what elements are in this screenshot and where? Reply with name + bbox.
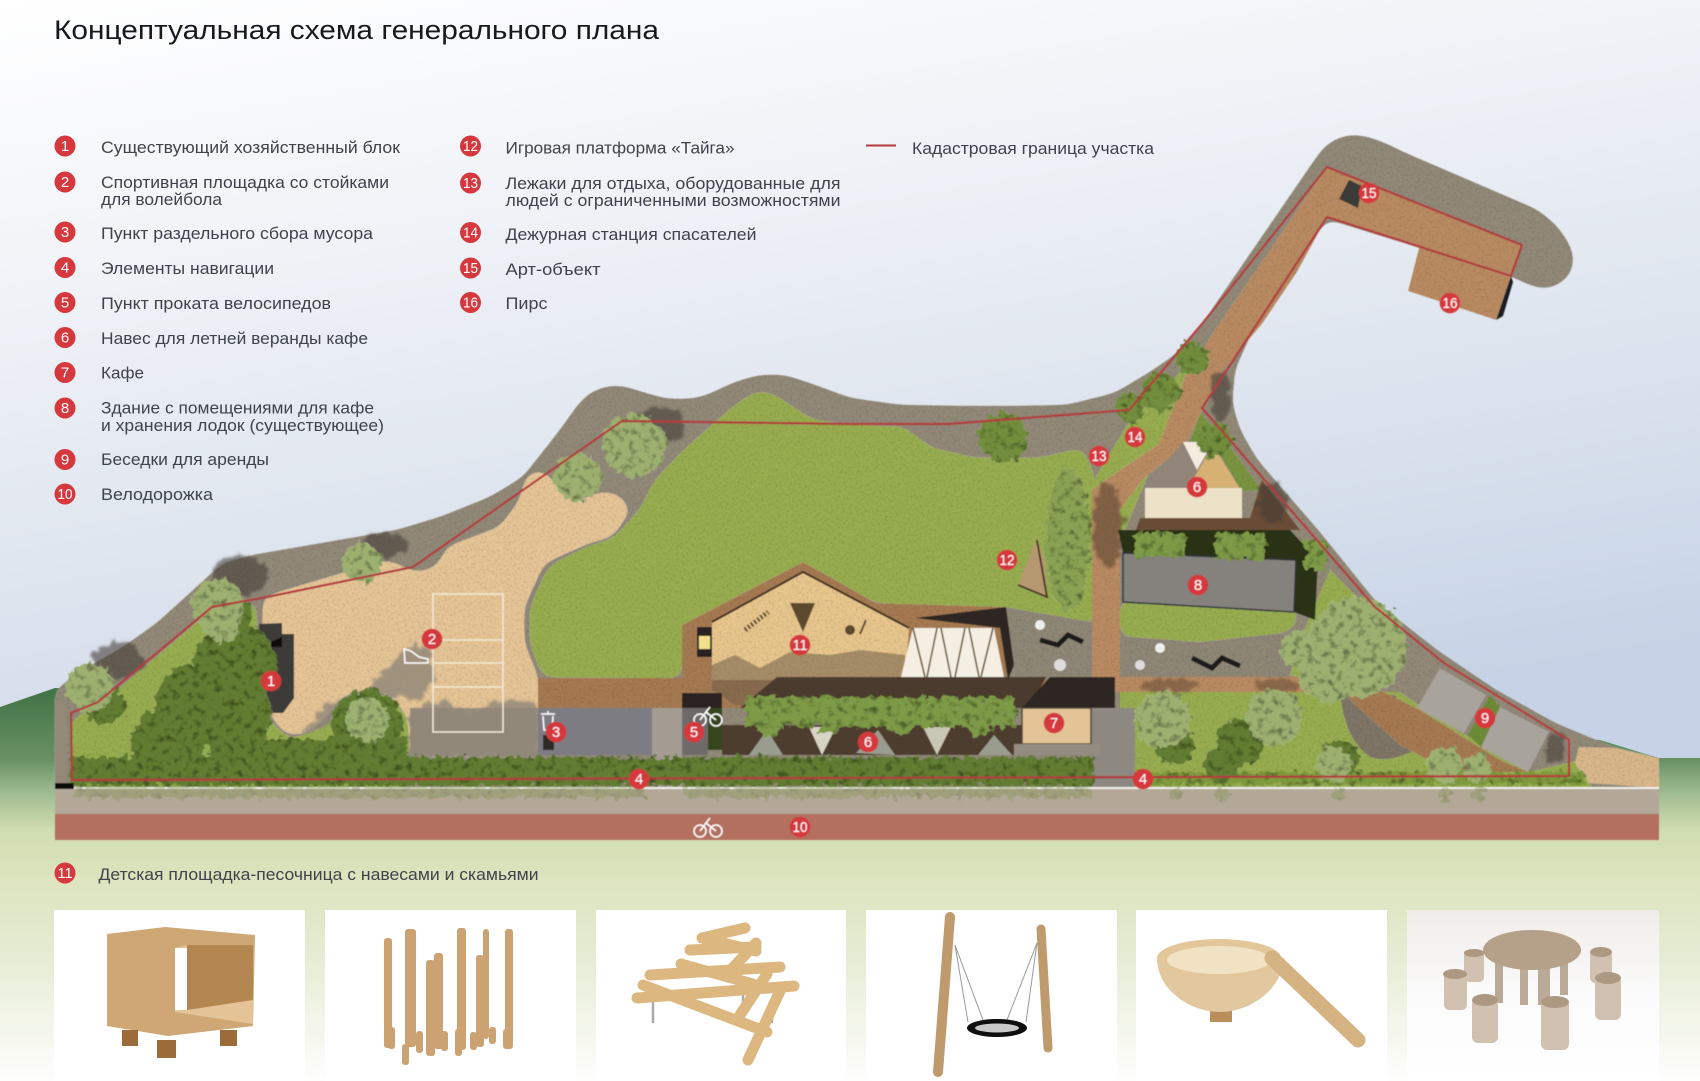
playground legend: item 11: 11	[58, 865, 72, 882]
marker 7: 7	[1050, 715, 1058, 732]
cafe shade paving	[1014, 744, 1100, 755]
veranda canopy north	[1145, 442, 1242, 518]
legend item 8	[54, 398, 384, 435]
marker 11: 11	[792, 637, 808, 654]
playground tent 12	[1018, 538, 1047, 597]
white curb	[74, 787, 1659, 789]
playground sand	[712, 572, 909, 680]
building 8 dark hedge backdrop	[1118, 530, 1318, 620]
bike lane	[55, 814, 1659, 840]
grass beside veranda	[1190, 412, 1262, 492]
tree shadows	[92, 369, 1565, 762]
shaded groves	[70, 599, 1585, 786]
marker 6 upper: 6	[1193, 479, 1201, 496]
legend: column one	[54, 136, 401, 504]
marker 10: 10	[792, 819, 808, 836]
legend item 13: людей с ограниченными возможностями	[506, 192, 840, 210]
legend item 10: Велодорожка	[101, 486, 214, 504]
pergola	[915, 607, 1014, 680]
legend item 8: Здание с помещениями для кафе	[101, 400, 374, 418]
marker 14	[1125, 427, 1145, 447]
light trees	[66, 413, 1492, 783]
site plan	[55, 135, 1659, 840]
playground kiosk	[697, 627, 712, 657]
pier and boardwalk	[1092, 167, 1522, 692]
wood plaza around playground	[538, 562, 1050, 708]
marker 7	[1044, 713, 1064, 733]
card: round table with stumps	[1407, 910, 1659, 1081]
legend item 2: Спортивная площадка со стойками	[101, 174, 389, 192]
icon: trash bin	[541, 711, 555, 730]
marker 15	[1359, 183, 1379, 203]
legend item 14: Дежурная станция спасателей	[506, 226, 756, 244]
cafe roof	[1022, 708, 1091, 744]
marker 12: 12	[1000, 552, 1014, 569]
sand court shadows	[300, 640, 538, 757]
card: wooden posts	[325, 910, 576, 1081]
legend item 6	[54, 327, 368, 348]
marker 3	[546, 722, 566, 742]
legend: cadastral boundary line: Кадастровая граница участка	[912, 140, 1155, 158]
marker 6 lower: 6	[864, 734, 872, 751]
legend item 16	[460, 292, 548, 313]
building 8 roof	[1123, 553, 1296, 612]
icon: bike lane	[694, 818, 722, 837]
veranda brown base	[1136, 480, 1300, 530]
legend item 12: Игровая платформа «Тайга»	[506, 140, 734, 158]
card: log climbing frame	[596, 910, 846, 1081]
sidewalk road	[55, 789, 1659, 814]
playground shaded fence	[712, 650, 905, 708]
marker 5: 5	[690, 724, 698, 741]
lower right gravel seat area	[1340, 695, 1425, 759]
curb black end	[55, 783, 74, 789]
sand area	[263, 470, 631, 757]
dark green trees	[978, 341, 1233, 462]
marker 6 lower	[858, 732, 878, 752]
marker 13	[1089, 446, 1109, 466]
gravel below building 8	[1120, 633, 1296, 677]
legend item 14	[460, 222, 756, 244]
building 1	[259, 623, 294, 713]
grass strip beside boardwalk	[1094, 345, 1200, 530]
marker 5	[684, 722, 704, 742]
legend item 5: 5	[61, 294, 69, 312]
card: wooden cube	[54, 910, 305, 1081]
legend item 8: и хранения лодок (существующее)	[101, 417, 384, 435]
marker 15: 15	[1362, 185, 1376, 202]
art object	[1339, 180, 1362, 208]
legend item 5	[54, 292, 331, 313]
legend item 12: 12	[463, 138, 478, 155]
legend: column two	[460, 136, 840, 313]
marker 3: 3	[552, 724, 560, 741]
land base: gravel	[55, 135, 1659, 800]
legend item 13: Лежаки для отдыха, оборудованные для	[506, 175, 840, 193]
hedge strip beside boardwalk	[1046, 468, 1090, 612]
legend item 1: Существующий хозяйственный блок	[101, 139, 401, 157]
marker 16	[1440, 293, 1460, 313]
legend item 2	[54, 172, 389, 209]
marker 6 upper	[1187, 477, 1207, 497]
legend item 2: для волейбола	[101, 191, 223, 209]
volleyball court	[433, 594, 503, 732]
marker 12	[997, 550, 1017, 570]
rocks and benches	[1035, 620, 1240, 671]
boardwalk tree shadow	[1093, 483, 1123, 567]
paved area left	[538, 708, 652, 755]
legend item 15: Арт-объект	[506, 261, 601, 279]
legend item 8: 8	[61, 400, 69, 417]
legend item 7: Кафе	[101, 364, 144, 382]
left lawn	[71, 600, 410, 788]
grass under building 8	[1120, 600, 1298, 642]
legend item 1: 1	[61, 138, 69, 155]
legend item 16: Пирс	[506, 295, 548, 313]
marker 4 right	[1133, 769, 1153, 789]
legend item 10: 10	[58, 486, 72, 503]
title: Концептуальная схема генерального плана	[54, 15, 660, 45]
awning band	[722, 725, 1022, 755]
marker 8	[1188, 575, 1208, 595]
legend item 16: 16	[463, 294, 478, 312]
background: green ground	[0, 688, 1700, 1081]
marker 9	[1475, 708, 1495, 728]
awning triangles	[749, 727, 1012, 755]
playground roof edge	[712, 572, 909, 628]
hedge over veranda	[745, 533, 1327, 737]
legend item 7: 7	[61, 364, 69, 382]
marker 11	[790, 635, 810, 655]
horizontal path shadows	[1142, 677, 1297, 693]
marker 9: 9	[1481, 710, 1489, 727]
paved sand shade and base gray	[410, 708, 540, 757]
legend item 3: Пункт раздельного сбора мусора	[101, 225, 374, 243]
map markers	[261, 183, 1495, 837]
dark deck	[740, 677, 1046, 708]
cadastral boundary	[71, 167, 1569, 780]
legend item 9: Беседки для аренды	[101, 451, 269, 469]
legend item 3	[54, 222, 374, 243]
legend item 2: 2	[61, 174, 69, 191]
legend item 10	[54, 484, 214, 504]
icon: shoe	[404, 649, 428, 663]
icon: bike rental	[694, 707, 722, 726]
card: wooden bowl and slide	[1136, 910, 1387, 1081]
playground equipment	[745, 603, 866, 635]
pier dark edge	[1496, 276, 1513, 320]
legend item 9	[54, 449, 269, 470]
gravel patch near sails	[1006, 607, 1092, 680]
marker 1	[261, 671, 281, 691]
sail shades	[901, 628, 1004, 677]
legend item 9: 9	[61, 452, 69, 468]
legend item 13	[460, 172, 840, 210]
legend item 4: Элементы навигации	[101, 260, 274, 278]
legend item 15: 15	[463, 260, 478, 277]
legend item 1	[54, 136, 401, 157]
legend item 4	[54, 257, 274, 278]
marker 8: 8	[1194, 577, 1202, 594]
land left and right edge fill	[55, 700, 1659, 790]
legend item 6: Навес для летней веранды кафе	[101, 330, 368, 348]
marker 4 left: 4	[635, 771, 643, 788]
trash bin base	[543, 735, 554, 750]
paved crossing right	[1091, 708, 1135, 788]
bike rental paving	[682, 693, 722, 755]
grass near big tree	[1285, 570, 1360, 680]
marker 2: 2	[428, 631, 436, 648]
marker 13: 13	[1092, 448, 1106, 465]
marker 14: 14	[1128, 429, 1142, 446]
right lawn	[1120, 692, 1592, 787]
hanging foliage over sidewalk	[75, 786, 1485, 801]
marker 1: 1	[267, 673, 275, 690]
legend item 12	[460, 136, 734, 158]
legend item 3: 3	[61, 224, 69, 241]
playground legend: item 11: Детская площадка-песочница с навесами и скамьями	[98, 866, 538, 884]
legend item 7	[54, 362, 144, 383]
legend item 4: 4	[61, 260, 69, 276]
main lawn	[530, 391, 1094, 678]
right end sand	[1575, 747, 1659, 788]
paved crossing	[652, 708, 682, 788]
legend item 6: 6	[61, 330, 69, 346]
cafe dark canopy	[1022, 677, 1115, 744]
legend item 13: 13	[463, 175, 478, 192]
legend item 15	[460, 258, 601, 279]
legend item 5: Пункт проката велосипедов	[101, 295, 331, 313]
marker 4 left	[629, 769, 649, 789]
legend item 14: 14	[463, 224, 478, 242]
marker 10	[790, 817, 810, 837]
marker 16: 16	[1442, 295, 1458, 312]
marker 2	[422, 629, 442, 649]
gazebos	[1417, 668, 1549, 772]
card: nest swing	[866, 910, 1117, 1081]
wood path to gazebos	[1340, 680, 1528, 772]
marker 4 right: 4	[1139, 771, 1147, 788]
